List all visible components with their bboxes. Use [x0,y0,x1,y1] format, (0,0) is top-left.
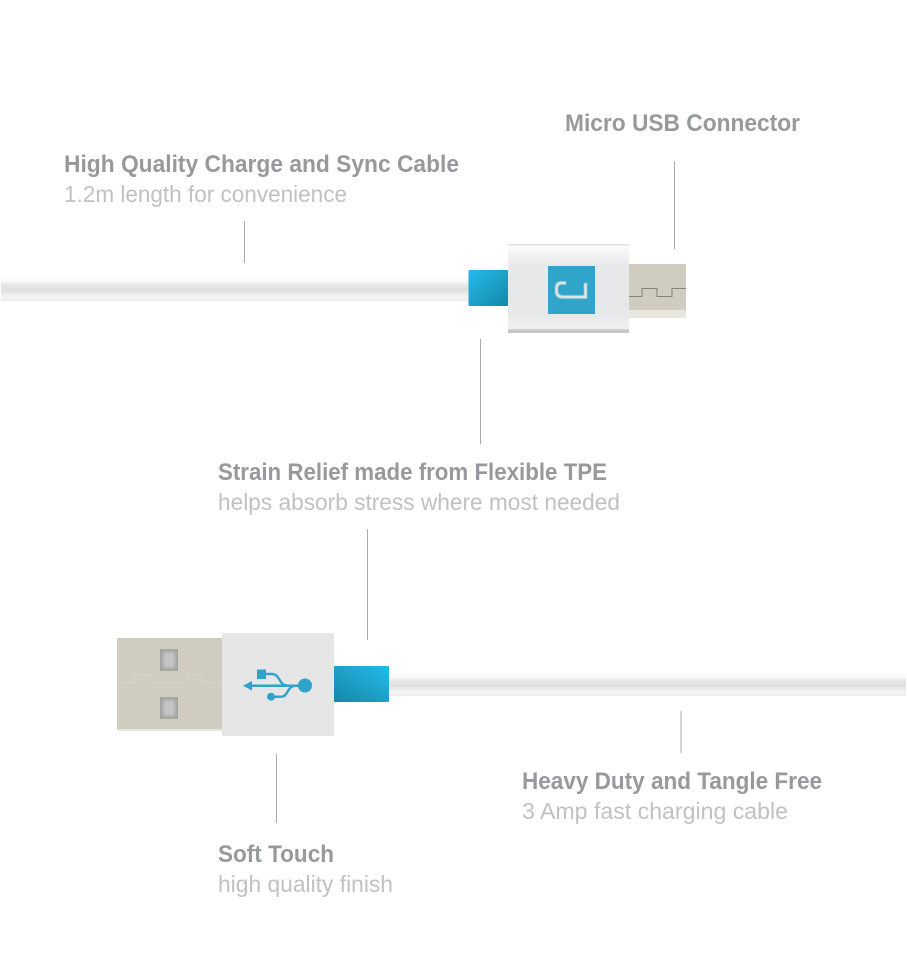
heading: high quality cable: 1.2m length for convenience [64,181,347,207]
icon: usb symbol [243,670,312,701]
micro connector metal [629,264,686,318]
usb-a metal connector [117,638,222,731]
micro usb cable assembly [1,244,686,333]
heading: soft touch [218,841,393,897]
heading: strain relief: Strain Relief made from Flexible TPE [218,459,607,486]
heading: strain relief: helps absorb stress where most needed [218,489,620,515]
cable top [1,277,471,300]
heading: heavy duty: 3 Amp fast charging cable [522,798,788,824]
strain relief bottom [334,666,389,702]
heading: high quality cable: High Quality Charge and Sync Cable [64,151,459,178]
cable bottom [388,673,906,696]
heading: heavy duty: Heavy Duty and Tangle Free [522,768,822,795]
heading: high quality cable [64,151,459,207]
brand logo [548,266,595,314]
strain relief top [468,270,508,306]
micro connector housing [508,244,629,333]
leader lines [244,161,681,823]
heading: micro usb connector: Micro USB Connector [565,110,800,137]
heading: heavy duty [522,768,822,824]
usb-a housing [222,633,334,736]
heading: soft touch: high quality finish [218,871,393,897]
heading: soft touch: Soft Touch [218,841,334,868]
heading: strain relief [218,459,620,515]
usb-a cable assembly [117,633,906,736]
